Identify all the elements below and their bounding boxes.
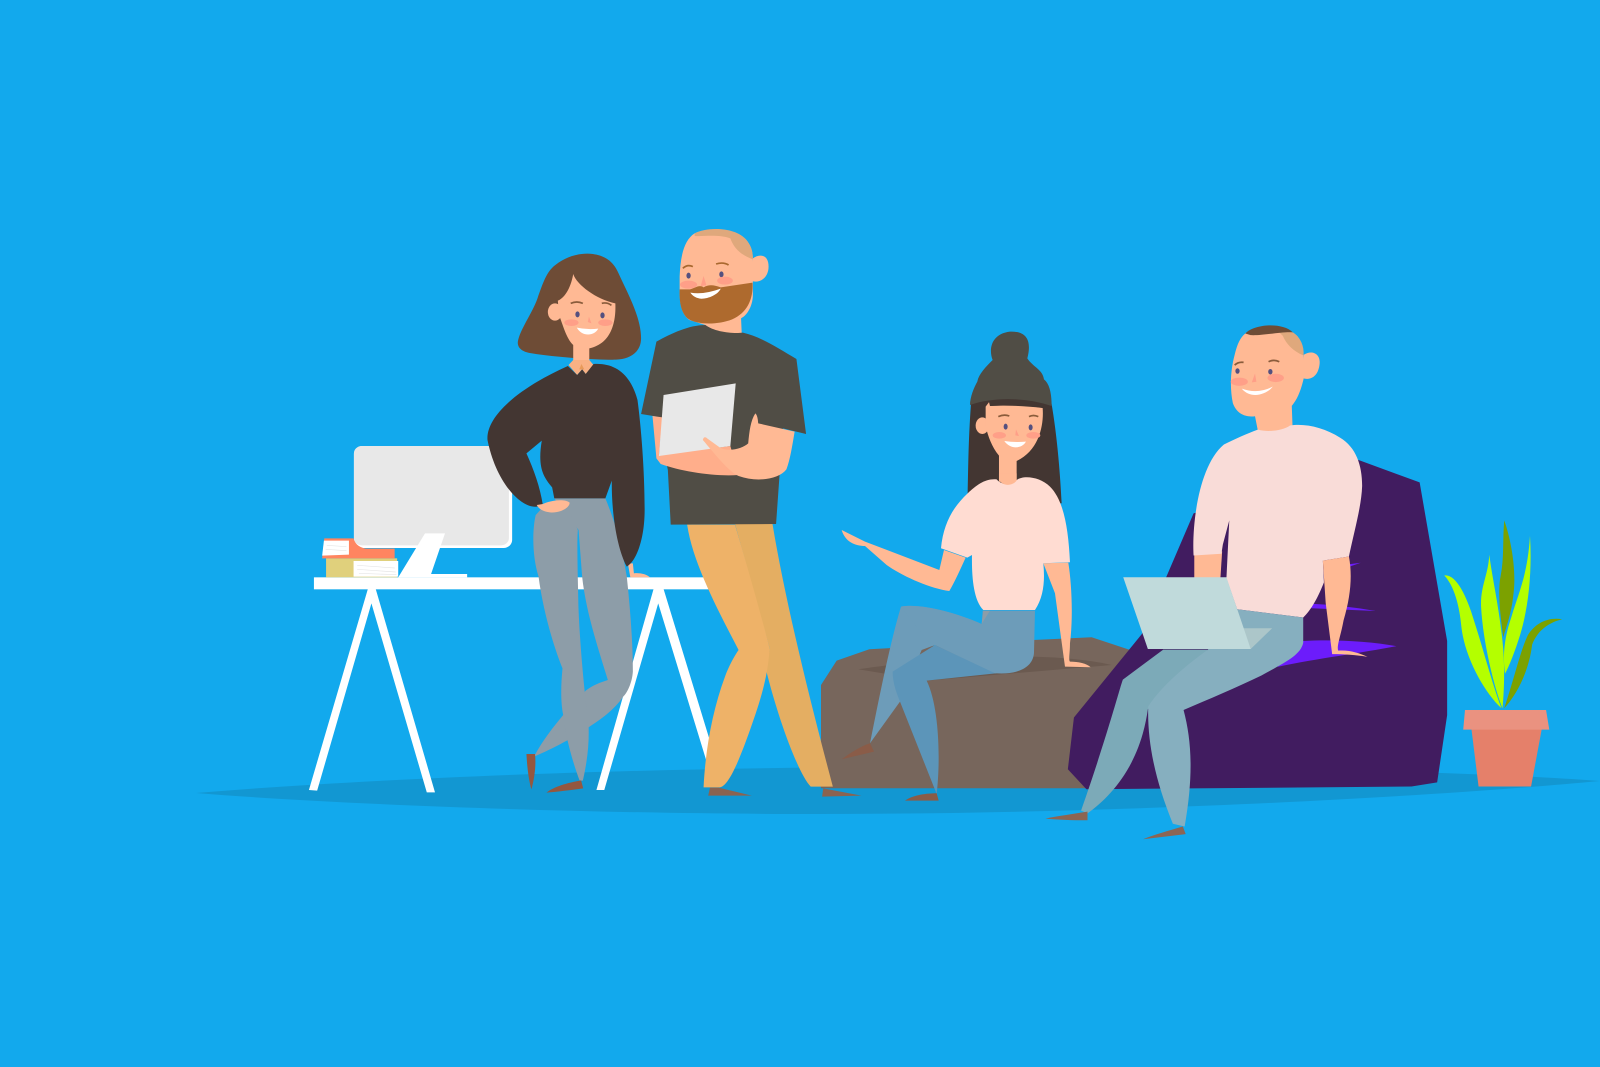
leaf: lime centre xyxy=(1481,555,1504,708)
back arm xyxy=(1194,551,1222,579)
person: woman with brown hair xyxy=(487,254,650,793)
neck opening xyxy=(999,473,1017,485)
ear xyxy=(976,417,989,434)
trousers: hips and thigh xyxy=(901,606,1035,674)
trousers: back leg xyxy=(735,524,833,787)
desk top xyxy=(314,577,710,589)
tablet xyxy=(659,383,736,456)
pot xyxy=(1471,729,1542,787)
potted plant xyxy=(1444,520,1562,787)
trousers: far leg shin xyxy=(870,606,982,743)
facial features xyxy=(1231,360,1284,395)
desk legs left xyxy=(309,589,435,792)
collar xyxy=(569,360,594,375)
monitor stand xyxy=(398,533,467,577)
beanie xyxy=(970,332,1052,406)
leaf: lime right xyxy=(1504,536,1531,674)
head xyxy=(680,229,753,335)
right arm resting xyxy=(1043,563,1091,667)
floor shadow xyxy=(196,767,1600,814)
shoes xyxy=(708,788,861,797)
trousers: front leg xyxy=(1148,609,1303,827)
pot rim xyxy=(1463,710,1549,730)
beard xyxy=(680,283,753,323)
shoes xyxy=(526,754,583,793)
fringe xyxy=(988,397,1044,408)
ear xyxy=(751,256,769,282)
laptop lid xyxy=(1123,577,1251,649)
ear xyxy=(1302,352,1320,379)
shoes xyxy=(1045,812,1186,839)
desk with computer and books xyxy=(309,446,711,792)
hair xyxy=(1245,325,1304,356)
jumper xyxy=(1193,425,1362,618)
monitor xyxy=(354,446,512,548)
ear xyxy=(548,303,562,321)
trousers: back leg xyxy=(1081,650,1208,813)
beanbag: purple xyxy=(1068,460,1447,789)
hair xyxy=(695,229,753,259)
t-shirt xyxy=(941,477,1070,610)
left arm raised xyxy=(842,530,966,591)
shoes xyxy=(842,743,939,801)
lower book xyxy=(326,558,398,577)
beanbag: brown rock xyxy=(821,637,1140,788)
waist shadow xyxy=(982,611,990,624)
leaf: lime left xyxy=(1444,575,1501,708)
facial features xyxy=(564,302,612,335)
right arm and hand xyxy=(703,413,795,479)
sweater xyxy=(487,364,645,567)
right arm xyxy=(1323,557,1367,657)
leaf: olive centre xyxy=(1499,520,1514,638)
neck and head xyxy=(1231,327,1304,432)
hand on desk xyxy=(628,563,650,577)
t-shirt xyxy=(641,325,806,525)
hair xyxy=(518,254,641,360)
person: man with laptop seated xyxy=(1045,325,1367,839)
hand on hip xyxy=(537,500,570,512)
facial features xyxy=(993,415,1040,447)
trousers: standing leg xyxy=(533,500,589,781)
trousers: near leg xyxy=(893,645,997,794)
trousers: front leg xyxy=(687,525,770,787)
face and neck xyxy=(558,274,615,363)
leaf: olive right xyxy=(1504,619,1562,708)
smile xyxy=(690,289,721,299)
left arm xyxy=(652,416,739,475)
facial features xyxy=(680,263,733,289)
upper book xyxy=(322,538,395,558)
desk legs right xyxy=(596,589,711,790)
long hair xyxy=(968,395,1062,503)
person: woman in beanie seated xyxy=(842,332,1091,801)
trousers: crossing leg xyxy=(534,498,633,757)
laptop keyboard xyxy=(1243,628,1272,649)
person: bearded man with tablet xyxy=(641,229,861,797)
face and neck xyxy=(986,400,1043,482)
